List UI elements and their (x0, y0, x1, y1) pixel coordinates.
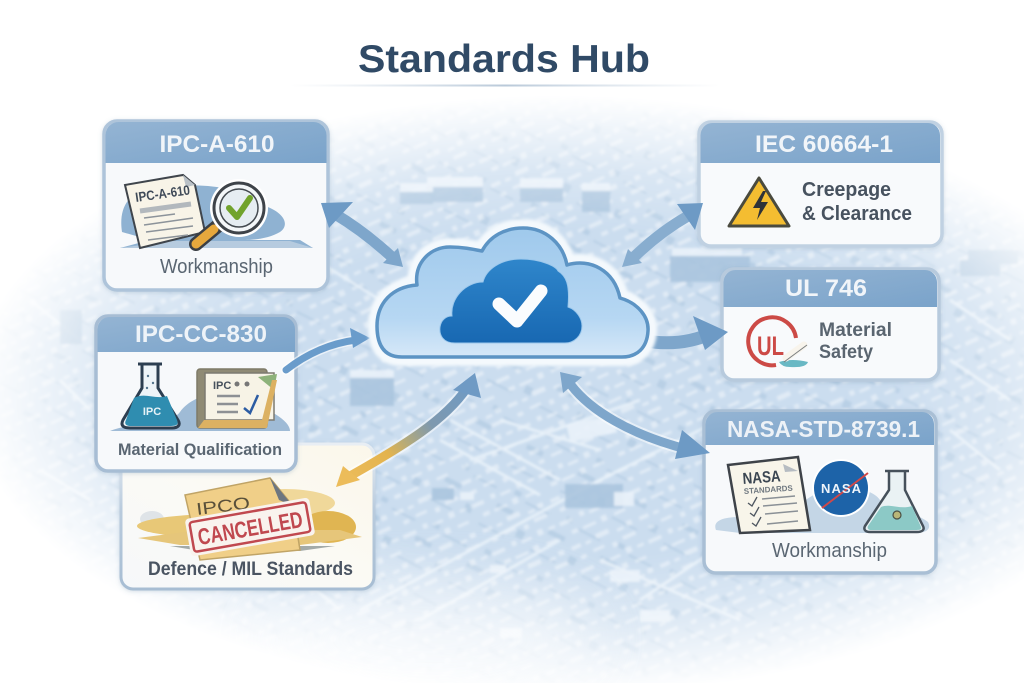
panel: IEC 60664-1: IEC 60664-1 (755, 131, 893, 158)
decorative chips (60, 186, 1018, 508)
label: material safety: Material (819, 320, 892, 341)
label: material safety (819, 320, 892, 363)
arrow: hub to UL 746 (640, 316, 728, 350)
decorative traces (30, 215, 1010, 620)
panel: IPC-CC-830: Material Qualification (118, 440, 282, 459)
central cloud hub (377, 228, 648, 357)
icon: high voltage warning (729, 178, 789, 226)
title: Standards Hub (358, 38, 650, 81)
panel: IPC-A-610 (104, 121, 328, 290)
icon: flask and qualification folder (110, 364, 290, 431)
label: creepage and clearance: Creepage (802, 179, 891, 201)
arrow: hub to Defence / MIL Standards (336, 373, 481, 487)
label: material safety: Safety (819, 342, 873, 363)
icon: inspected document with magnifier (120, 175, 313, 248)
icon: check mark (499, 291, 541, 321)
icon: inspected document with magnifier: IPC-A-610 (134, 182, 191, 205)
icon: NASA standards checklist (715, 457, 929, 533)
icon: inner cloud (440, 259, 582, 343)
arrow: hub to NASA-STD-8739.1 (560, 372, 710, 459)
panel: IPC-CC-830: IPC-CC-830 (135, 321, 267, 348)
icon: NASA badge: NASA (821, 481, 862, 496)
icon: UL mark with swab (748, 317, 808, 367)
panel: Defence / MIL Standards (121, 444, 374, 589)
label: creepage and clearance (802, 179, 912, 225)
panel: NASA-STD-8739.1: Workmanship (772, 540, 887, 562)
panel: UL 746: UL 746 (785, 275, 867, 302)
icon: NASA standards checklist: NASA (742, 468, 782, 488)
panel: NASA-STD-8739.1: NASA-STD-8739.1 (727, 416, 920, 442)
panel: IEC 60664-1 (699, 122, 942, 246)
icon: UL mark with swab: UL (757, 331, 784, 361)
icon: NASA standards checklist: STANDARDS (744, 484, 794, 496)
panel: IPC-CC-830 (96, 316, 296, 471)
icon: flask and qualification folder: IPC (143, 406, 161, 418)
stamp: cancelled: CANCELLED (196, 506, 305, 550)
icon: flask and qualification folder: IPC (213, 380, 231, 392)
stamp: cancelled (185, 497, 315, 557)
panel: Defence / MIL Standards: Defence / MIL Standards (148, 559, 353, 580)
icon: cancelled document (137, 478, 362, 560)
panel: IPC-A-610: IPC-A-610 (160, 131, 274, 158)
arrow: IEC 60664-1 to hub (622, 203, 703, 267)
panel: UL 746 (722, 269, 939, 380)
icon: flask (864, 471, 924, 532)
label: creepage and clearance: & Clearance (802, 203, 912, 225)
arrow: IPC-A-610 to hub (321, 202, 403, 267)
panel: NASA-STD-8739.1 (704, 411, 936, 573)
panel: IPC-A-610: Workmanship (160, 256, 273, 278)
icon: NASA badge (812, 459, 870, 517)
icon: cancelled document: IPCO (195, 494, 251, 519)
arrow: IPC-CC-830 to hub (286, 328, 370, 370)
